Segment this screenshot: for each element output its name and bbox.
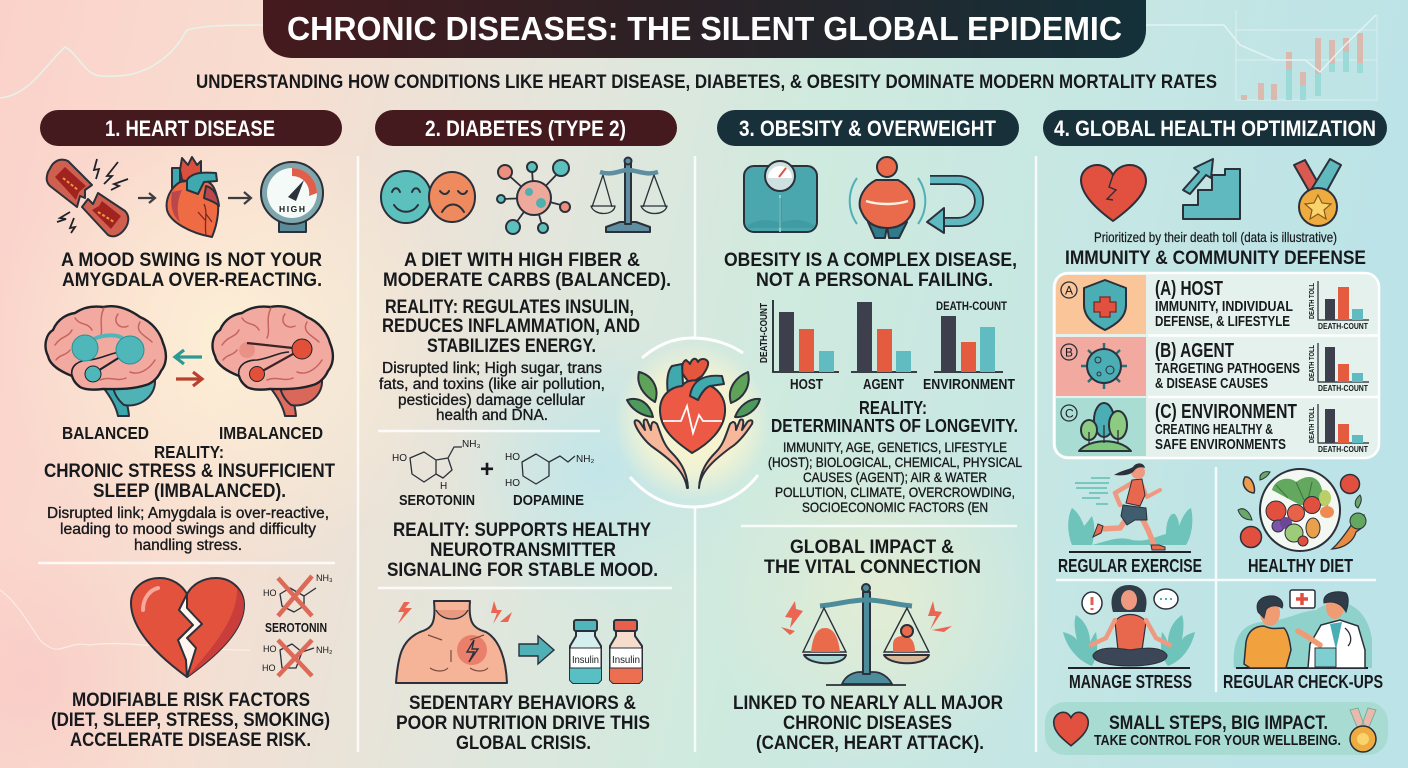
molecule labels: DOPAMINE	[513, 493, 584, 509]
icon: anatomical heart	[167, 157, 219, 237]
body text: POLLUTION, CLIMATE, OVERCROWDING,	[775, 484, 1015, 500]
row B: & DISEASE CAUSES	[1155, 375, 1268, 392]
plus sign: +	[480, 456, 494, 483]
label: REGULAR EXERCISE	[1058, 555, 1202, 576]
heading: diabetes: 2. DIABETES (TYPE 2)	[425, 116, 626, 141]
heading: obesity: 3. OBESITY & OVERWEIGHT	[739, 116, 996, 141]
icon: dopamine molecule	[505, 452, 594, 489]
closing statement: LINKED TO NEARLY ALL MAJOR	[733, 692, 1003, 714]
row A: (A) HOST	[1155, 278, 1223, 300]
closing statement	[51, 689, 330, 751]
icon: mood faces	[381, 171, 475, 223]
heading: obesity	[717, 110, 1019, 146]
body text	[768, 439, 1022, 515]
reality heading	[44, 442, 335, 502]
headline	[724, 249, 1017, 291]
row C: (C) ENVIRONMENT	[1155, 401, 1297, 423]
reality statement	[382, 296, 640, 357]
bar chart: environment	[923, 299, 1015, 393]
reality statement	[387, 519, 658, 581]
reality statement: SIGNALING FOR STABLE MOOD.	[387, 559, 658, 581]
icon: dopamine molecule: HO	[505, 478, 520, 489]
icon: crossed serotonin molecule: NH₃	[316, 573, 333, 583]
icon: balanced brain	[46, 306, 166, 416]
body text	[379, 360, 605, 424]
reality statement: REDUCES INFLAMMATION, AND	[382, 315, 640, 337]
molecule labels	[399, 493, 584, 509]
heading: global health optimization	[1043, 110, 1387, 146]
brain labels: BALANCED	[62, 423, 149, 443]
row C: CREATING HEALTHY &	[1155, 421, 1273, 438]
icon: central heart in hands	[614, 338, 770, 507]
title	[263, 0, 1146, 58]
body text: health and DNA.	[436, 407, 548, 424]
subheading: GLOBAL IMPACT &	[790, 536, 954, 558]
closing statement: (CANCER, HEART ATTACK).	[756, 732, 984, 754]
headline	[383, 249, 671, 291]
headline: A MOOD SWING IS NOT YOUR	[61, 249, 322, 271]
reality heading: REALITY:	[859, 398, 927, 418]
tile: regular check-ups	[1223, 590, 1383, 692]
icon: crossed dopamine molecule: NH₂	[316, 645, 333, 655]
callout: small steps, big impact	[1045, 702, 1388, 755]
row C: SAFE ENVIRONMENTS	[1155, 436, 1286, 453]
body text: CAUSES (AGENT); AIR & WATER	[803, 469, 987, 485]
icon: insulin vials: Insulin	[572, 655, 599, 666]
body text: pesticides) damage cellular	[398, 392, 585, 409]
bar chart: host: DEATH-COUNT	[758, 303, 770, 363]
icon: dopamine molecule: NH₂	[576, 454, 594, 465]
icon: medal	[1294, 159, 1341, 226]
heading: diabetes	[375, 110, 677, 146]
panel: obesity	[717, 110, 1022, 754]
reality statement: REALITY: REGULATES INSULIN,	[385, 296, 634, 318]
closing statement: ACCELERATE DISEASE RISK.	[70, 729, 311, 751]
tile: healthy diet	[1238, 469, 1366, 576]
panel: host agent environment table	[1054, 273, 1379, 458]
headline: NOT A PERSONAL FAILING.	[756, 269, 993, 291]
tile: manage stress	[1063, 585, 1195, 692]
title: CHRONIC DISEASES: THE SILENT GLOBAL EPIDEMIC	[287, 10, 1122, 47]
icon: crossed dopamine molecule: HO	[262, 663, 276, 673]
bar chart: environment: DEATH-COUNT	[936, 299, 1008, 313]
callout: small steps, big impact: TAKE CONTROL FOR YOUR WELLBEING.	[1094, 732, 1341, 749]
bar chart: agent	[851, 302, 917, 393]
heading: heart disease: 1. HEART DISEASE	[105, 116, 275, 141]
row B: TARGETING PATHOGENS	[1155, 360, 1300, 377]
bar chart: environment: ENVIRONMENT	[923, 377, 1015, 393]
icon: serotonin molecule: H	[440, 481, 447, 492]
icon: insulin vials	[570, 620, 642, 683]
bar chart: agent: AGENT	[863, 377, 904, 393]
icon: ruptured artery	[47, 159, 128, 236]
icon: weighing scale	[744, 161, 817, 232]
icon: dopamine molecule: HO	[505, 452, 520, 463]
row B: DEATH-COUNT	[1318, 383, 1369, 393]
brain labels	[62, 423, 323, 443]
body text: IMMUNITY, AGE, GENETICS, LIFESTYLE	[783, 439, 1007, 455]
icon: blood pressure gauge	[261, 162, 323, 232]
arrow	[519, 636, 554, 664]
subtitle: UNDERSTANDING HOW CONDITIONS LIKE HEART DISEASE, DIABETES, & OBESITY DOMINATE MODERN MORTALITY RATES	[196, 71, 1217, 93]
body text	[47, 505, 329, 554]
tile: regular exercise	[1058, 463, 1202, 576]
headline: AMYGDALA OVER-REACTING.	[62, 269, 322, 291]
label: MANAGE STRESS	[1069, 671, 1192, 692]
closing statement: SEDENTARY BEHAVIORS &	[409, 692, 636, 714]
row A: DEATH-COUNT	[1318, 321, 1369, 331]
icon: stairs with arrow	[1183, 159, 1240, 219]
callout: small steps, big impact: SMALL STEPS, BIG IMPACT.	[1109, 713, 1328, 734]
reality heading: SLEEP (IMBALANCED).	[93, 480, 286, 502]
row A	[1061, 278, 1369, 331]
panel: global health optimization	[1043, 110, 1388, 755]
icon: weighted balance scale	[781, 584, 952, 685]
bar chart: host	[758, 300, 839, 393]
headline: OBESITY IS A COMPLEX DISEASE,	[724, 249, 1017, 271]
row A: IMMUNITY, INDIVIDUAL	[1155, 298, 1293, 315]
arrow	[228, 192, 251, 204]
panel: heart disease	[38, 110, 342, 751]
arrows between brains	[175, 350, 202, 386]
headline	[61, 249, 322, 291]
icon: serotonin molecule: HO	[392, 453, 407, 464]
icon: cell network	[497, 160, 570, 234]
bar chart: host: HOST	[790, 377, 823, 393]
row B	[1061, 340, 1369, 393]
subheading	[764, 536, 981, 578]
body text: Disrupted link; Amygdala is over-reactive,	[47, 505, 329, 522]
closing statement: MODIFIABLE RISK FACTORS	[72, 689, 310, 711]
row B: (B) AGENT	[1155, 340, 1234, 362]
panel: diabetes	[375, 110, 677, 754]
reality statement: STABILIZES ENERGY.	[427, 335, 596, 357]
row C: DEATH TOLL	[1309, 406, 1316, 443]
arrow	[138, 193, 155, 203]
closing statement: GLOBAL CRISIS.	[456, 732, 591, 754]
icon: blood pressure gauge: HIGH	[279, 204, 305, 214]
row A: DEFENSE, & LIFESTYLE	[1155, 313, 1290, 330]
brain labels: IMBALANCED	[219, 423, 323, 443]
reality heading: CHRONIC STRESS & INSUFFICIENT	[44, 460, 335, 482]
icon: crossed dopamine molecule	[262, 640, 333, 676]
icon: insulin vials: Insulin	[612, 655, 640, 666]
row A: A	[1065, 284, 1073, 298]
body text: (HOST); BIOLOGICAL, CHEMICAL, PHYSICAL	[768, 454, 1022, 470]
closing statement: POOR NUTRITION DRIVE THIS	[396, 712, 650, 734]
icon: serotonin molecule	[392, 439, 481, 492]
caption: Prioritized by their death toll (data is illustrative)	[1094, 229, 1337, 245]
leaves	[627, 372, 760, 417]
icon: broken heart	[1081, 165, 1146, 221]
heading: heart disease	[40, 110, 342, 146]
reality heading	[771, 398, 1018, 436]
row C: DEATH-COUNT	[1318, 444, 1369, 454]
icon: crossed serotonin molecule: HO	[263, 588, 276, 598]
closing statement	[396, 692, 650, 754]
headline: A DIET WITH HIGH FIBER &	[404, 249, 640, 271]
icon: crossed dopamine molecule: HO	[263, 644, 276, 654]
icon: serotonin molecule: NH₃	[462, 439, 481, 450]
body text: handling stress.	[134, 537, 242, 554]
reality heading: REALITY:	[154, 442, 224, 462]
row B: DEATH TOLL	[1309, 344, 1316, 381]
closing statement: (DIET, SLEEP, STRESS, SMOKING)	[51, 709, 330, 731]
row A: DEATH TOLL	[1309, 282, 1316, 319]
reality statement: REALITY: SUPPORTS HEALTHY	[393, 519, 651, 541]
icon: overweight person with loop arrow	[850, 157, 979, 238]
label: HEALTHY DIET	[1248, 555, 1354, 576]
closing statement	[733, 692, 1003, 754]
icon: crossed serotonin molecule	[263, 573, 333, 616]
icon: imbalanced brain	[213, 306, 333, 416]
body text: SOCIOECONOMIC FACTORS (EN	[802, 499, 988, 515]
headline: MODERATE CARBS (BALANCED).	[383, 269, 671, 291]
icon: torso with chest pain	[396, 601, 512, 683]
body text: leading to mood swings and difficulty	[60, 521, 316, 538]
icon: broken heart	[131, 578, 244, 677]
closing statement: CHRONIC DISEASES	[783, 712, 952, 734]
row B: B	[1065, 346, 1073, 360]
subheading: THE VITAL CONNECTION	[764, 556, 981, 578]
reality heading: DETERMINANTS OF LONGEVITY.	[771, 416, 1018, 436]
label: serotonin: SEROTONIN	[265, 621, 327, 635]
molecule labels: SEROTONIN	[399, 493, 475, 509]
row C: C	[1065, 406, 1074, 420]
subheading: IMMUNITY & COMMUNITY DEFENSE	[1065, 248, 1366, 269]
body text: Disrupted link; High sugar, trans	[382, 360, 602, 377]
body text: fats, and toxins (like air pollution,	[379, 376, 605, 393]
row C	[1061, 401, 1369, 454]
reality statement: NEUROTRANSMITTER	[430, 539, 616, 561]
icon: balance scale	[591, 158, 667, 232]
